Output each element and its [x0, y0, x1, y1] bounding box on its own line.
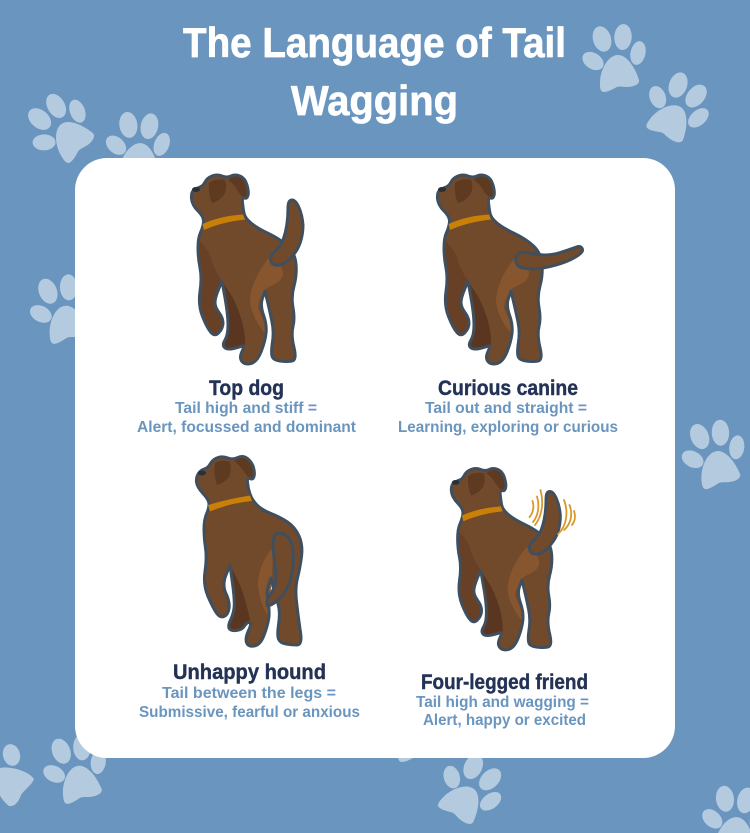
white card panel	[75, 158, 675, 758]
text: top dog	[137, 377, 356, 436]
tail wagging	[529, 492, 560, 554]
title: Wagging	[291, 77, 458, 124]
text: top dog: Top dog	[209, 377, 284, 400]
text: curious canine: Tail out and straight =	[425, 400, 587, 417]
tail straight	[516, 246, 582, 269]
dog: tail high and wagging	[451, 468, 575, 650]
text: four-legged friend: Alert, happy or excited	[423, 712, 586, 729]
text: top dog: Tail high and stiff =	[175, 400, 317, 417]
text: four-legged friend: Four-legged friend	[421, 671, 588, 694]
tail raised	[271, 200, 303, 265]
dog: tail out and straight	[437, 175, 582, 364]
text: unhappy hound: Unhappy hound	[173, 661, 326, 684]
text: curious canine: Curious canine	[438, 377, 578, 400]
tail tucked	[267, 533, 293, 606]
text: unhappy hound	[139, 661, 360, 721]
dog: tail between the legs	[196, 456, 302, 646]
text: top dog: Alert, focussed and dominant	[137, 419, 356, 436]
wag motion lines	[530, 490, 575, 534]
dog: tail high and stiff	[191, 175, 303, 364]
text: curious canine: Learning, exploring or curious	[398, 419, 618, 436]
title	[183, 19, 566, 124]
text: four-legged friend: Tail high and wagging =	[416, 694, 589, 711]
text: unhappy hound: Submissive, fearful or anxious	[139, 704, 360, 721]
text: unhappy hound: Tail between the legs =	[162, 685, 336, 702]
title: The Language of Tail	[183, 19, 566, 66]
text: four-legged friend	[416, 671, 589, 729]
text: curious canine	[398, 377, 618, 436]
